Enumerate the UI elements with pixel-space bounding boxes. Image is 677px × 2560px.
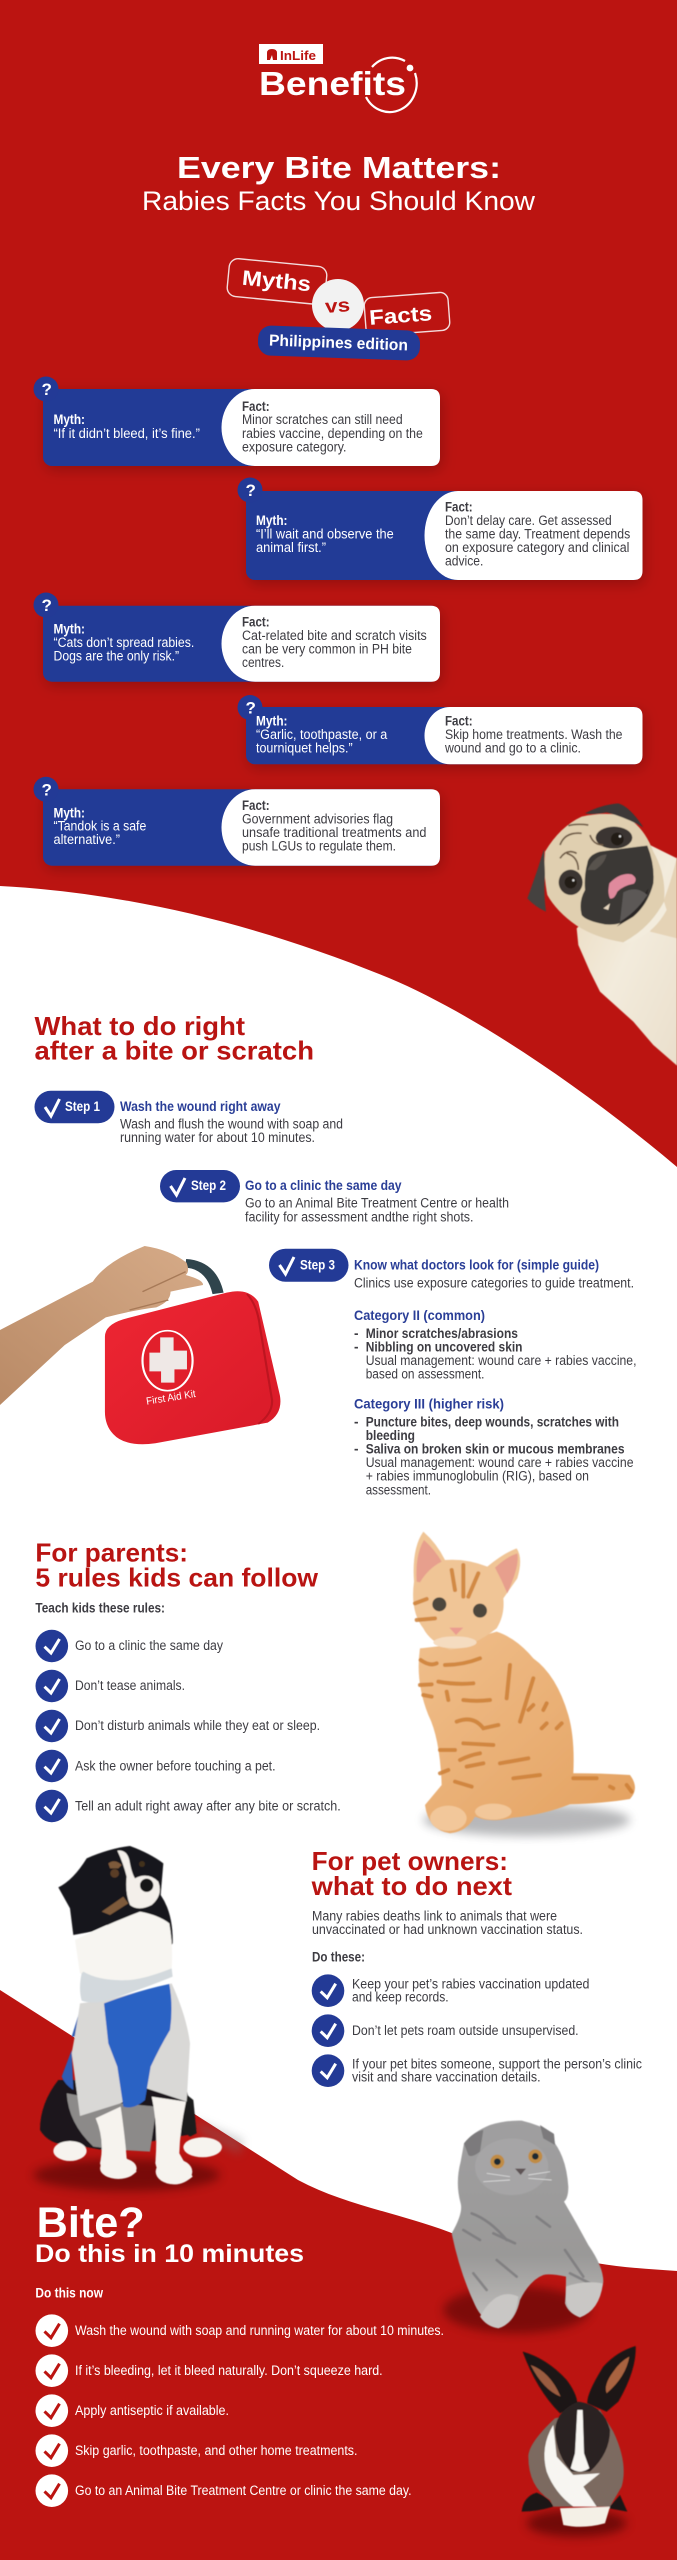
category II: Usual management: wound care + rabies vaccine,: [366, 1353, 636, 1368]
step text: Go to a clinic the same day: [245, 1178, 402, 1193]
fact text: [445, 500, 630, 568]
heading: bite: [35, 2199, 304, 2268]
item 2: If it’s bleeding, let it bleed naturally. Don’t squeeze hard.: [75, 2363, 383, 2378]
fact text: Cat-related bite and scratch visits: [242, 628, 427, 643]
badge: Myths vs Facts: Myths: [241, 267, 312, 296]
action 2: Don’t let pets roam outside unsupervised.: [352, 2023, 579, 2038]
question bubble: [34, 376, 58, 402]
logo: InLife Benefits: InLife: [280, 48, 316, 63]
illustration: hand holding first aid kit: [0, 1246, 280, 1444]
intro text: Many rabies deaths link to animals that were: [312, 1909, 557, 1924]
rule 3: [36, 1710, 320, 1742]
myth text: [54, 621, 194, 664]
step text: Wash and flush the wound with soap and: [120, 1117, 343, 1132]
fact text: unsafe traditional treatments and: [242, 825, 426, 840]
myth text: Myth:: [54, 805, 85, 820]
fact text: exposure category.: [242, 440, 346, 454]
item 2: [36, 2354, 383, 2387]
heading: for parents: 5 rules kids can follow: [35, 1563, 319, 1593]
step badge: [160, 1170, 240, 1202]
item 1: Wash the wound with soap and running water for about 10 minutes.: [75, 2323, 444, 2338]
myth text: [54, 805, 146, 847]
heading: what to do: What to do right: [34, 1011, 245, 1041]
action 1: and keep records.: [352, 1990, 449, 2005]
fact text: Skip home treatments. Wash the: [445, 727, 622, 742]
title: Every Bite Matters:: [177, 150, 501, 185]
myth fact card 3: [34, 592, 440, 682]
subheading: do this now: Do this now: [35, 2286, 103, 2301]
step badge: Step 2: [191, 1178, 226, 1193]
question bubble: ?: [246, 481, 256, 500]
logo: InLife Benefits: Benefits: [259, 65, 406, 102]
fact text: [242, 798, 426, 854]
myth text: alternative.”: [54, 832, 120, 847]
myth text: [256, 513, 394, 555]
category II: Category II (common): [354, 1308, 485, 1323]
fact text: advice.: [445, 554, 483, 568]
item 3: Apply antiseptic if available.: [75, 2403, 229, 2418]
step text: Wash the wound right away: [120, 1099, 281, 1114]
step 2: [160, 1170, 509, 1224]
fact text: Fact:: [242, 798, 270, 813]
fact text: [242, 615, 427, 670]
category III: Saliva on broken skin or mucous membranes: [366, 1442, 624, 1457]
action 3: If your pet bites someone, support the person’s clinic: [352, 2056, 642, 2071]
question bubble: [34, 777, 58, 802]
step badge: Step 3: [300, 1257, 335, 1272]
badge: Myths vs Facts: Facts: [368, 302, 433, 330]
myth text: [54, 412, 200, 441]
fact text: on exposure category and clinical: [445, 540, 629, 555]
step 3: [269, 1249, 636, 1497]
myth fact card 1: [34, 376, 440, 466]
myth text: tourniquet helps.”: [256, 741, 353, 756]
fact text: [444, 714, 622, 756]
action 1: [312, 1974, 589, 2007]
illustration: dog in shirt: [33, 1846, 243, 2191]
step text: Go to an Animal Bite Treatment Centre or health: [245, 1196, 509, 1211]
question bubble: [238, 695, 262, 720]
rule 1: Go to a clinic the same day: [75, 1638, 223, 1653]
title: [142, 150, 536, 216]
fact text: Fact:: [445, 500, 473, 515]
category III: assessment.: [366, 1482, 431, 1497]
heading: for pet owners: [311, 1846, 512, 1901]
question bubble: ?: [42, 596, 52, 615]
step badge: [34, 1091, 114, 1123]
illustration: hand holding first aid kit: First Aid Kit: [145, 1388, 197, 1408]
question bubble: [34, 592, 58, 618]
step 1: [34, 1091, 343, 1145]
logo: InLife Benefits: [259, 44, 417, 112]
step text: Know what doctors look for (simple guide): [354, 1257, 599, 1272]
item 5: Go to an Animal Bite Treatment Centre or clinic the same day.: [75, 2483, 412, 2498]
category III: Usual management: wound care + rabies vaccine: [366, 1455, 634, 1470]
category II: Minor scratches/abrasions: [366, 1326, 518, 1341]
category III: + rabies immunoglobulin (RIG), based on: [366, 1469, 589, 1484]
action 1: Keep your pet’s rabies vaccination updated: [352, 1976, 589, 1991]
fact text: push LGUs to regulate them.: [242, 839, 396, 854]
action 3: [312, 2054, 642, 2087]
item 4: Skip garlic, toothpaste, and other home treatments.: [75, 2443, 358, 2458]
item 5: [36, 2474, 412, 2507]
fact text: Fact:: [445, 714, 473, 729]
heading: bite: Do this in 10 minutes: [35, 2240, 304, 2268]
step text: [354, 1257, 634, 1290]
question bubble: ?: [42, 780, 52, 799]
category III: -: [354, 1442, 358, 1457]
category II: -: [354, 1326, 358, 1341]
fact text: the same day. Treatment depends: [445, 526, 630, 542]
illustration: rabbit: [522, 2346, 636, 2537]
item 1: [36, 2314, 444, 2347]
checklist: kid rules: [36, 1630, 341, 1822]
question bubble: ?: [246, 698, 256, 718]
checklist: bite first aid: [36, 2314, 444, 2507]
myth text: Myth:: [54, 412, 85, 427]
category II: based on assessment.: [366, 1367, 484, 1382]
fact text: Minor scratches can still need: [242, 412, 403, 427]
fact text: Government advisories flag: [242, 812, 393, 827]
action 2: [312, 2014, 579, 2047]
myth text: Myth:: [54, 621, 85, 636]
heading: what to do: after a bite or scratch: [34, 1035, 314, 1065]
intro text: [312, 1909, 583, 1964]
heading: for pet owners: what to do next: [311, 1871, 512, 1901]
intro text: Do these:: [312, 1949, 365, 1964]
step text: facility for assessment andthe right shots.: [245, 1209, 474, 1224]
intro text: unvaccinated or had unknown vaccination status.: [312, 1922, 583, 1937]
fact text: can be very common in PH bite: [242, 642, 412, 657]
badge: Myths vs Facts: Philippines edition: [269, 333, 408, 354]
category III: -: [354, 1415, 358, 1430]
heading: bite: Bite?: [37, 2199, 145, 2247]
myth text: “Garlic, toothpaste, or a: [256, 727, 388, 742]
step text: [120, 1099, 343, 1145]
category III: Puncture bites, deep wounds, scratches with: [366, 1415, 619, 1430]
step text: Clinics use exposure categories to guide treatment.: [354, 1275, 634, 1290]
myth text: “If it didn’t bleed, it’s fine.”: [54, 426, 200, 441]
myth text: “I’ll wait and observe the: [256, 526, 394, 542]
fact text: Fact:: [242, 399, 270, 414]
rule 2: [36, 1670, 185, 1702]
badge: Myths vs Facts: [226, 258, 450, 361]
checklist: pet owner actions: [312, 1974, 642, 2087]
myth text: “Tandok is a safe: [54, 819, 146, 834]
category II: Nibbling on uncovered skin: [366, 1340, 522, 1355]
myth fact card 5: [34, 777, 440, 866]
category II: -: [354, 1340, 358, 1355]
fact text: [242, 399, 423, 454]
question bubble: ?: [42, 380, 52, 399]
myth text: [256, 714, 388, 756]
step text: [245, 1178, 509, 1224]
background: white middle section with curved edges: [0, 886, 677, 2271]
item 3: [36, 2394, 229, 2427]
fact text: wound and go to a clinic.: [444, 741, 581, 756]
category III: [354, 1396, 634, 1497]
item 4: [36, 2434, 358, 2467]
illustration: pug: [527, 803, 677, 1066]
fact text: rabies vaccine, depending on the: [242, 426, 423, 441]
illustration: grey scottish fold cat: [443, 2121, 603, 2333]
myth text: “Cats don’t spread rabies.: [54, 635, 194, 650]
fact text: centres.: [242, 655, 284, 670]
fact text: Don’t delay care. Get assessed: [445, 513, 612, 528]
myth fact card 2: [238, 478, 642, 580]
step text: running water for about 10 minutes.: [120, 1130, 315, 1145]
step badge: Step 1: [65, 1099, 100, 1114]
rule 1: [36, 1630, 223, 1662]
rule 5: [36, 1790, 341, 1822]
category II: [354, 1308, 636, 1382]
question bubble: [238, 478, 262, 502]
rule 4: [36, 1750, 276, 1782]
myth text: Dogs are the only risk.”: [54, 649, 179, 664]
myth text: Myth:: [256, 714, 288, 729]
fact text: Fact:: [242, 615, 270, 630]
heading: what to do: [34, 1011, 314, 1065]
heading: for pet owners: For pet owners:: [312, 1846, 508, 1876]
category III: Category III (higher risk): [354, 1396, 504, 1411]
category III: bleeding: [366, 1428, 415, 1443]
rule 2: Don’t tease animals.: [75, 1678, 185, 1693]
rule 3: Don’t disturb animals while they eat or sleep.: [75, 1718, 320, 1733]
action 3: visit and share vaccination details.: [352, 2070, 541, 2085]
subheading: teach kids: Teach kids these rules:: [35, 1601, 165, 1616]
title: Rabies Facts You Should Know: [142, 186, 536, 216]
illustration: orange kitten: [413, 1532, 635, 1836]
badge: Myths vs Facts: vs: [324, 295, 351, 318]
rule 5: Tell an adult right away after any bite or scratch.: [75, 1799, 341, 1814]
myth fact card 4: [238, 695, 642, 764]
step badge: [269, 1249, 348, 1282]
heading: for parents: [35, 1538, 319, 1593]
rule 4: Ask the owner before touching a pet.: [75, 1759, 276, 1774]
heading: for parents: For parents:: [35, 1538, 188, 1568]
myth text: animal first.”: [256, 540, 326, 555]
myth text: Myth:: [256, 513, 288, 528]
